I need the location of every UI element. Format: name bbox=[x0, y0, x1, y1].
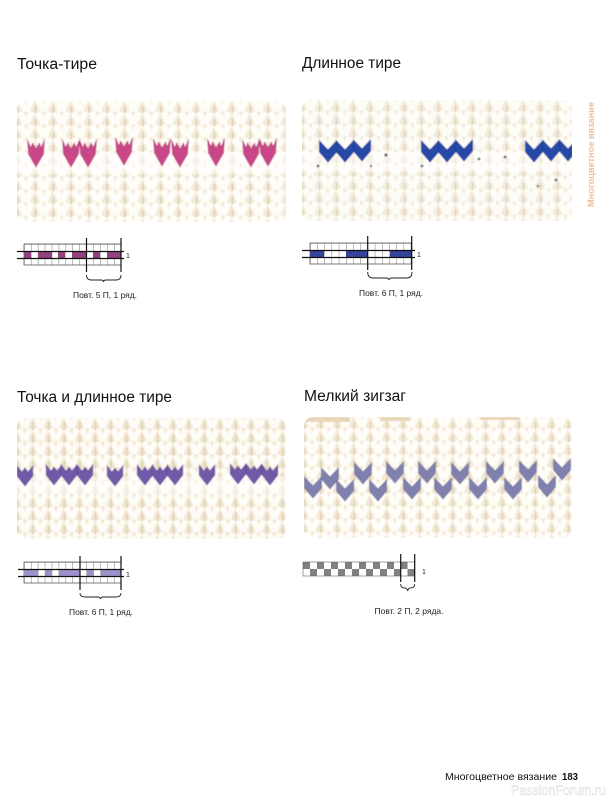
chart: blue long dash bbox=[302, 236, 421, 280]
swatch photo: purple dot and long dash knitting bbox=[17, 418, 286, 539]
chart: pink dot-dash bbox=[17, 238, 130, 282]
caption: repeat 6 stitches (blue): Повт. 6 П, 1 ряд. bbox=[359, 288, 423, 298]
caption: repeat 6 stitches (purple): Повт. 6 П, 1 ряд. bbox=[69, 607, 133, 617]
heading: dot-dash: Точка-тире bbox=[17, 56, 97, 73]
side tab label: Многоцветное вязание bbox=[586, 102, 596, 207]
chart: purple dot and long dash bbox=[18, 556, 130, 599]
chart: grey checker small zigzag: 1 bbox=[422, 569, 426, 576]
chart: blue long dash: 1 bbox=[417, 252, 421, 259]
swatch photo: grey-violet small zigzag knitting bbox=[304, 417, 572, 538]
chart: grey checker small zigzag bbox=[303, 554, 426, 591]
heading: small zigzag: Мелкий зигзаг bbox=[304, 388, 406, 405]
swatch photo: pink dot-dash knitting bbox=[17, 101, 286, 222]
caption: repeat 5 stitches: Повт. 5 П, 1 ряд. bbox=[73, 290, 137, 300]
chart: purple dot and long dash: 1 bbox=[126, 572, 130, 579]
footer: chapter name and page number: Многоцветное вязание bbox=[445, 771, 557, 783]
heading: dot and long dash: Точка и длинное тире bbox=[17, 389, 172, 406]
footer: chapter name and page number: 183 bbox=[562, 771, 578, 783]
watermark: PassionForum.ru bbox=[511, 783, 606, 798]
chart: pink dot-dash: 1 bbox=[126, 253, 130, 260]
swatch photo: blue long dash knitting bbox=[302, 100, 576, 221]
caption: repeat 2 stitches: Повт. 2 П, 2 ряда. bbox=[374, 606, 444, 616]
heading: long dash: Длинное тире bbox=[302, 55, 401, 72]
